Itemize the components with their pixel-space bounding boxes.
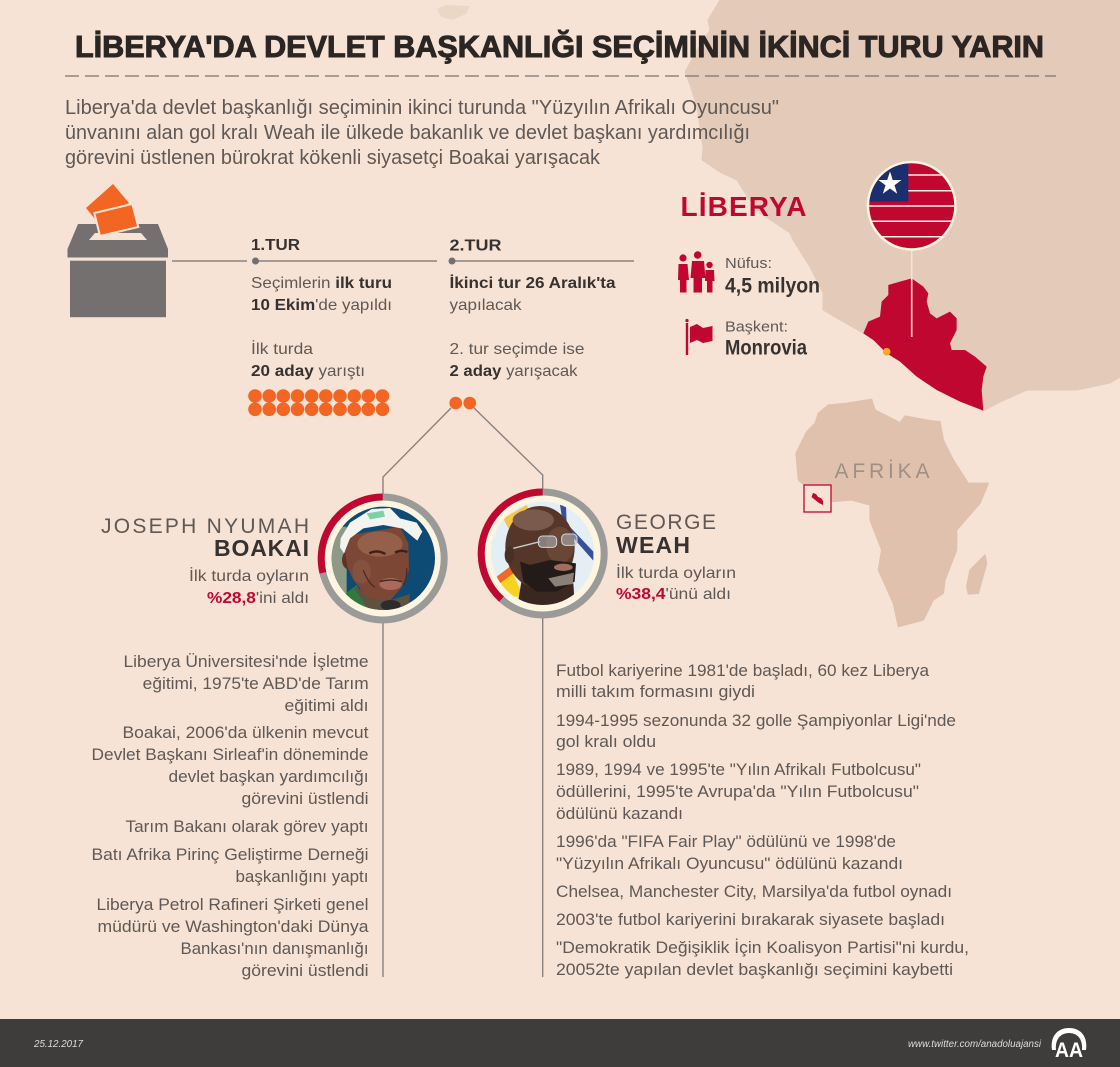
pin line	[911, 250, 913, 337]
heading: Liberya: LİBERYA	[680, 191, 806, 222]
text block: Boakai biography: Batı Afrika Pirinç Geliştirme Derneği	[92, 845, 368, 864]
panel: second round: 2 aday yarışacak	[450, 363, 579, 380]
text block: Boakai biography	[92, 652, 369, 980]
text block: Weah biography: 1989, 1994 ve 1995'te "Yılın Afrikalı Futbolcusu"	[556, 760, 921, 779]
map: Africa	[796, 399, 988, 627]
panel: Weah name and vote: %38,4 'ünü aldı	[616, 586, 731, 603]
text: population	[725, 255, 820, 298]
text block: Weah biography: "Yüzyılın Afrikalı Oyuncusu" ödülünü kazandı	[556, 854, 903, 873]
panel: Weah portrait	[481, 492, 604, 615]
text block: Boakai biography: eğitimi aldı	[284, 696, 368, 715]
text: capital: Monrovia	[725, 336, 807, 360]
text: capital	[725, 318, 807, 360]
intro text: Liberya'da devlet başkanlığı seçiminin ikinci turunda "Yüzyılın Afrikalı Oyuncusu"	[65, 97, 779, 119]
panel: Weah name and vote: WEAH	[616, 532, 690, 558]
icon: ballot box	[68, 184, 168, 317]
panel: Boakai name and vote: BOAKAI	[214, 535, 309, 561]
footer	[0, 1019, 1120, 1067]
intro text	[65, 97, 779, 169]
text block: Weah biography: 20052te yapılan devlet başkanlığı seçimini kaybetti	[556, 960, 953, 979]
text block: Boakai biography: Devlet Başkanı Sirleaf'in döneminde	[92, 745, 368, 764]
text block: Boakai biography: Bankası'nın danışmanlığı	[180, 939, 368, 958]
panel: second round: 2. tur seçimde ise	[450, 341, 585, 358]
panel: first round: İlk turda	[251, 339, 313, 358]
panel: Boakai name and vote: %28,8'ini aldı	[207, 590, 309, 607]
text block: Weah biography: 2003'te futbol kariyerini bırakarak siyasete başladı	[556, 910, 945, 929]
icon: Anadolu Agency logo: AA	[1055, 1039, 1083, 1062]
text block: Boakai biography: devlet başkan yardımcılığı	[168, 767, 368, 786]
text block: Boakai biography: Tarım Bakanı olarak görev yaptı	[126, 817, 368, 836]
icon: twenty candidate dots	[248, 389, 389, 416]
panel: Weah name and vote	[616, 511, 736, 603]
panel: first round	[251, 237, 392, 380]
panel: first round: 10 Ekim'de yapıldı	[251, 297, 392, 314]
text block: Weah biography: "Demokratik Değişiklik İçin Koalisyon Partisi"ni kurdu,	[556, 938, 969, 957]
panel: Weah name and vote: İlk turda oyların	[616, 563, 736, 582]
text block: Weah biography: 1994-1995 sezonunda 32 golle Şampiyonlar Ligi'nde	[556, 711, 956, 730]
text block: Boakai biography: görevini üstlendi	[242, 789, 368, 808]
panel: first round: 1.TUR	[251, 237, 300, 254]
panel: second round: 2.TUR	[450, 238, 502, 254]
panel: second round: İkinci tur 26 Aralık'ta	[450, 274, 616, 292]
icon: two candidate dots	[449, 397, 476, 409]
text block: Boakai biography: görevini üstlendi	[242, 961, 368, 980]
text block: Weah biography	[556, 661, 969, 979]
icon: population	[678, 251, 714, 292]
text block: Weah biography: Futbol kariyerine 1981'de başladı, 60 kez Liberya	[556, 661, 930, 680]
text: population: 4,5 milyon	[725, 274, 820, 298]
text block: Boakai biography: Boakai, 2006'da ülkenin mevcut	[122, 723, 369, 742]
map: west Africa background	[437, 0, 1120, 411]
connector lines to candidates	[383, 407, 543, 977]
title: LİBERYA'DA DEVLET BAŞKANLIĞI SEÇİMİNİN İKİNCİ TURU YARIN	[75, 29, 1044, 64]
text block: Boakai biography: Liberya Petrol Rafineri Şirketi genel	[96, 895, 368, 914]
text block: Weah biography: 1996'da "FIFA Fair Play" ödülünü ve 1998'de	[556, 832, 896, 851]
locator: Liberia in Africa	[804, 485, 831, 512]
text block: Boakai biography: müdürü ve Washington'daki Dünya	[98, 917, 369, 936]
panel: second round	[450, 238, 616, 380]
panel: Boakai portrait	[321, 497, 444, 620]
text block: Weah biography: gol kralı oldu	[556, 732, 656, 751]
panel: Boakai name and vote: JOSEPH NYUMAH	[101, 515, 309, 538]
panel: first round: 20 aday yarıştı	[251, 363, 365, 380]
icon: Liberian flag	[865, 160, 960, 255]
map: Liberia	[863, 278, 987, 411]
timeline	[172, 258, 634, 264]
panel: first round: Seçimlerin ilk turu	[251, 275, 392, 292]
icon: Anadolu Agency logo	[1052, 1028, 1086, 1062]
footer: 25.12.2017	[33, 1039, 83, 1050]
text block: Weah biography: ödüllerini, 1995'te Avrupa'da "Yılın Futbolcusu"	[556, 782, 919, 801]
panel: Boakai name and vote	[101, 515, 309, 607]
panel: second round: yapılacak	[450, 297, 523, 314]
intro text: ünvanını alan gol kralı Weah ile ülkede bakanlık ve devlet başkanı yardımcılığı	[65, 122, 750, 144]
text: capital: Başkent:	[725, 318, 788, 336]
label: Africa: AFRİKA	[834, 460, 930, 483]
text block: Boakai biography: Liberya Üniversitesi'nde İşletme	[124, 652, 368, 671]
footer: www.twitter.com/anadoluajansi	[908, 1039, 1042, 1050]
text block: Weah biography: milli takım formasını giydi	[556, 682, 755, 701]
text: population: Nüfus:	[725, 255, 772, 272]
intro text: görevini üstlenen bürokrat kökenli siyasetçi Boakai yarışacak	[65, 147, 601, 169]
text block: Boakai biography: başkanlığını yaptı	[236, 867, 368, 886]
text block: Weah biography: Chelsea, Manchester City, Marsilya'da futbol oynadı	[556, 882, 952, 901]
text block: Weah biography: ödülünü kazandı	[556, 804, 683, 823]
panel: Weah name and vote: GEORGE	[616, 511, 716, 534]
text block: Boakai biography: eğitimi, 1975'te ABD'de Tarım	[143, 674, 369, 693]
panel: Boakai name and vote: İlk turda oyların	[189, 566, 309, 585]
icon: capital flag	[685, 319, 712, 355]
